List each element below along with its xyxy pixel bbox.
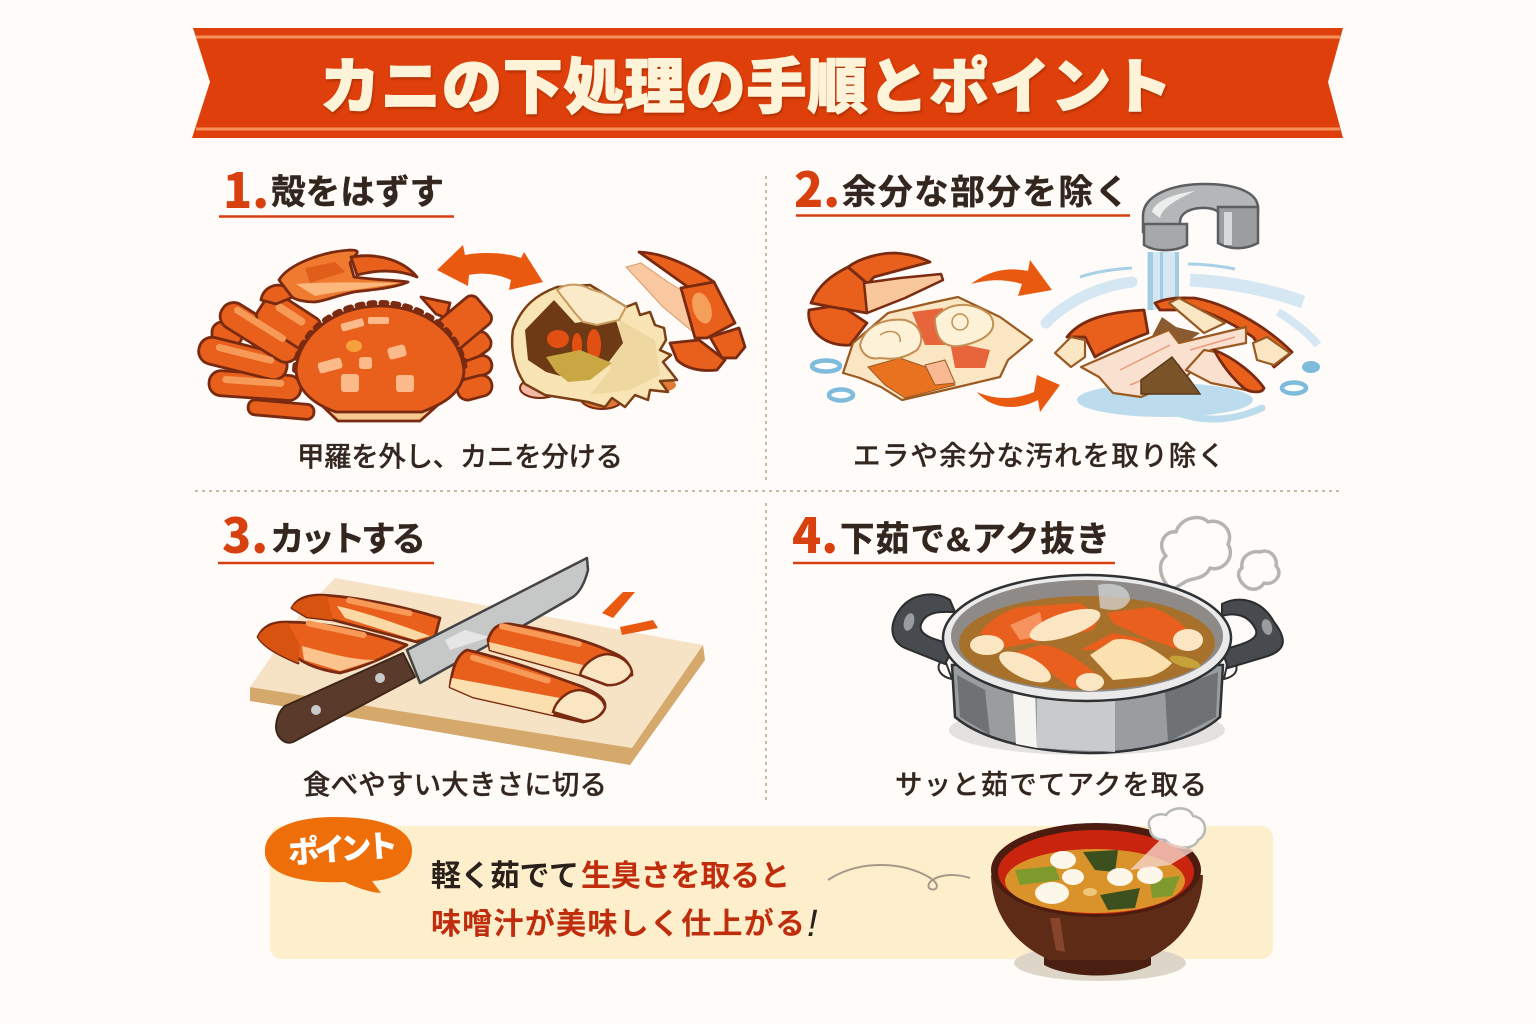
- heading: step 2: 2.: [794, 151, 840, 221]
- icon: detached claw: [626, 252, 745, 371]
- text: point message: 味噌汁が美味しく仕上がる: [431, 907, 805, 941]
- text: point message: !: [807, 903, 818, 945]
- icon: pot: [892, 575, 1283, 755]
- badge: ポイント: [265, 817, 412, 893]
- icon: faucet: [1143, 184, 1258, 250]
- heading: step 4: 下茹で&アク抜き: [840, 521, 1110, 559]
- caption: step 3: 食べやすい大きさに切る: [303, 769, 607, 800]
- icon: washed crab pieces: [1055, 298, 1292, 397]
- panel: point callout: [265, 808, 1273, 981]
- heading: step 1: 殻をはずす: [271, 174, 444, 212]
- panel: step 4: [792, 497, 1283, 800]
- arrow: double headed: [437, 245, 543, 290]
- decorative arrow squiggle: [828, 865, 970, 890]
- text: point message: 軽く茹でて: [431, 860, 579, 893]
- heading: step 1: 1.: [223, 152, 269, 222]
- caption: step 1: 甲羅を外し、カニを分ける: [297, 441, 623, 472]
- icon: cutting board: [250, 578, 705, 765]
- title: カニの下処理の手順とポイント: [320, 54, 1172, 121]
- panel: step 2: [794, 151, 1320, 471]
- panel: step 3: [218, 497, 705, 800]
- arrow: upper: [971, 260, 1052, 296]
- icon: whole crab: [196, 250, 495, 421]
- caption: step 4: サッと茹でてアクを取る: [895, 769, 1207, 800]
- heading: step 3: [218, 497, 434, 567]
- sub-element: tofu and seaweed: [1015, 850, 1180, 910]
- text: point message: [431, 860, 818, 945]
- arrow: lower: [977, 375, 1060, 412]
- text: point message: 生臭さを取ると: [581, 860, 790, 893]
- heading: step 2: [794, 151, 1130, 221]
- icon: left crab legs: [258, 595, 440, 673]
- sub-element: steam: [1149, 808, 1205, 848]
- heading: step 3: 3.: [222, 497, 268, 567]
- badge: ポイント: ポイント: [287, 828, 399, 871]
- icon: steam: [1161, 517, 1279, 590]
- icon: crab claw and meat: [809, 253, 1032, 400]
- heading: step 4: 4.: [792, 497, 838, 567]
- title banner: [192, 28, 1343, 138]
- heading: step 4: [792, 497, 1115, 567]
- panel: step 1: [196, 152, 745, 472]
- icon: cut sparks: [602, 592, 658, 635]
- icon: water splash: [1046, 264, 1318, 345]
- icon: miso soup bowl: [991, 808, 1205, 981]
- icon: knife: [276, 558, 588, 743]
- icon: right crab legs: [450, 623, 632, 722]
- sub-element: crab pieces in soup: [970, 602, 1203, 691]
- caption: step 2: エラや余分な汚れを取り除く: [853, 440, 1225, 471]
- heading: step 1: [219, 152, 454, 222]
- icon: opened crab shell: [512, 285, 677, 409]
- heading: step 2: 余分な部分を除く: [842, 174, 1129, 212]
- icon: water stream: [1147, 252, 1179, 310]
- heading: step 3: カットする: [270, 521, 426, 559]
